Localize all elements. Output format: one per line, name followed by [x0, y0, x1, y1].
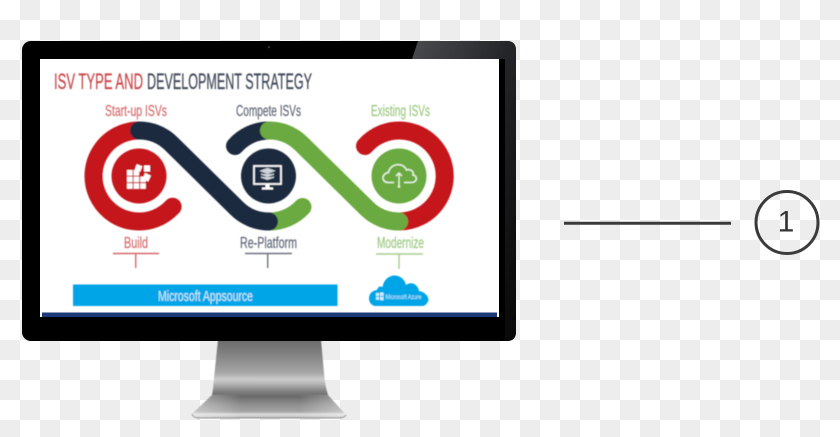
heading: Compete ISVs: Compete ISVs: [236, 103, 301, 120]
label: Modernize: [376, 235, 424, 269]
bezel gloss: [412, 41, 516, 341]
monitor stand: [192, 340, 346, 418]
callout line: [564, 222, 731, 225]
red arc: left ring: [94, 130, 173, 221]
label: Build: [113, 235, 159, 268]
monitor: [22, 41, 516, 418]
title: ISV TYPE AND: [54, 69, 143, 94]
label: Re-Platform: Re-Platform: [240, 235, 297, 252]
title: DEVELOPMENT STRATEGY: [147, 69, 312, 94]
webcam: [268, 46, 270, 48]
label: Re-Platform: [240, 235, 297, 268]
callout number badge: [756, 192, 818, 254]
heading: Start-up ISVs: Start-up ISVs: [105, 103, 167, 120]
green arc: middle ring bottom: [269, 207, 302, 222]
icon: cloud: [372, 148, 426, 204]
screen footer band: [42, 312, 497, 317]
infinity ribbon diagram: [94, 130, 445, 222]
icon: monitor with layers: [241, 148, 296, 204]
Microsoft Appsource bar: [73, 284, 338, 306]
windows logo: [376, 292, 384, 300]
red arc: right ring: [365, 131, 445, 222]
green S-curve: [269, 130, 399, 222]
Microsoft Azure cloud: Microsoft Azure: [386, 295, 422, 301]
Microsoft Appsource bar: Microsoft Appsource: [158, 288, 253, 305]
heading: Existing ISVs: Existing ISVs: [371, 103, 430, 120]
icon: build blocks: [112, 148, 166, 204]
label: Build: Build: [124, 235, 148, 252]
title: [54, 69, 312, 94]
screen: [40, 59, 499, 317]
callout number badge: 1: [778, 206, 794, 238]
Microsoft Azure cloud: [369, 275, 428, 306]
monitor bezel: [22, 41, 516, 341]
label: Modernize: Modernize: [377, 235, 424, 252]
navy arc: middle ring top: [235, 130, 269, 146]
navy S-curve: [139, 130, 269, 222]
slide content: [54, 69, 445, 306]
